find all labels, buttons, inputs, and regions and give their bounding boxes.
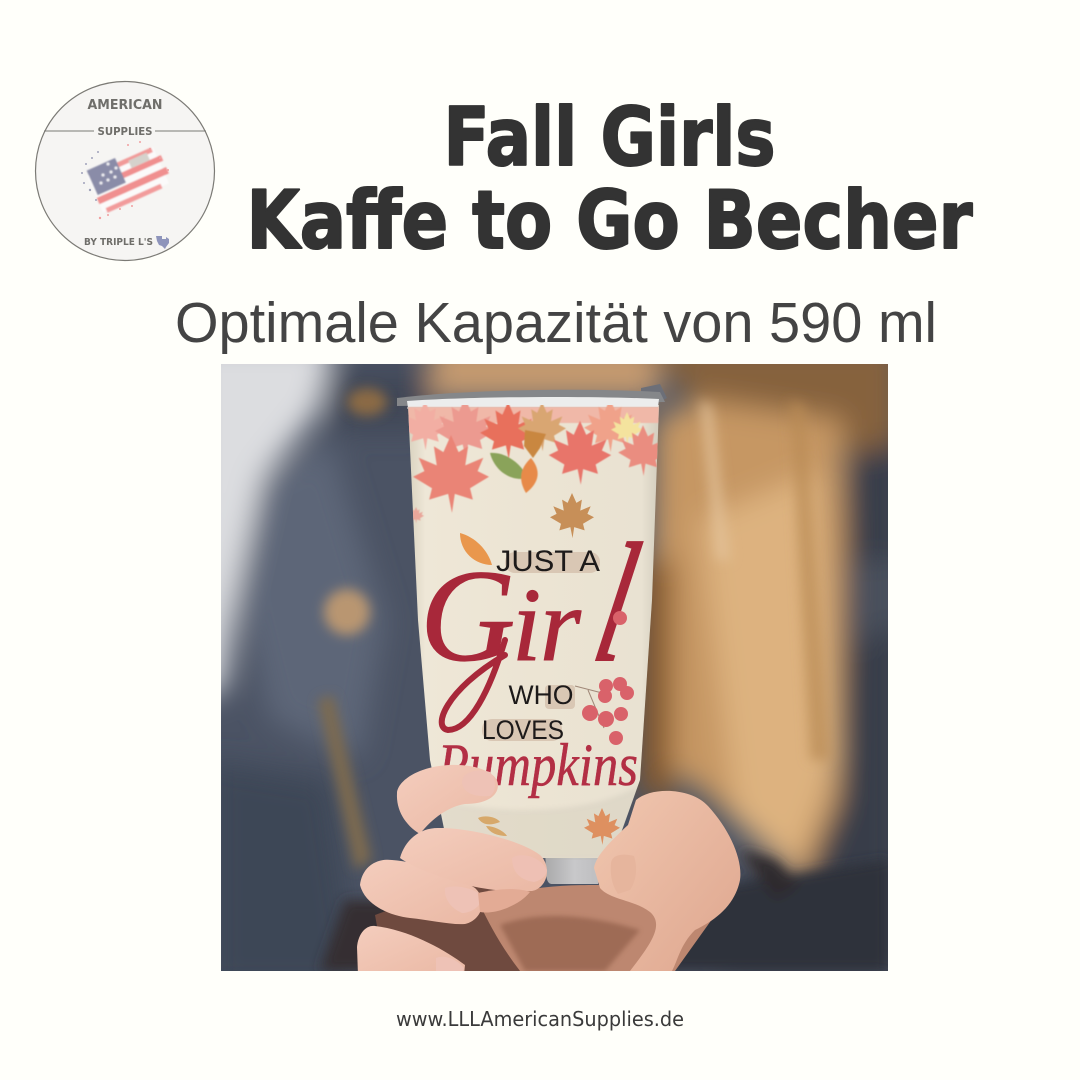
artwork word: Girl: i — [512, 566, 541, 683]
berries — [575, 611, 634, 745]
website url: www.LLLAmericanSupplies.de — [396, 1007, 684, 1031]
artwork text: Pumpkins: Pumpkins — [437, 732, 638, 798]
right thumb nail — [611, 855, 634, 882]
left index finger — [397, 765, 498, 834]
subtitle: Optimale Kapazität von 590 ml — [175, 291, 937, 355]
logo text: By Triple L's: BY TRIPLE L'S — [84, 237, 153, 248]
nail — [436, 957, 464, 971]
hands — [357, 765, 740, 975]
autumn leaves garland — [408, 405, 659, 522]
nail — [477, 771, 494, 796]
photo background: blurred jacket and hair — [221, 364, 888, 971]
tumbler bottom steel band — [545, 858, 598, 884]
artwork text: Who: WHO — [508, 680, 574, 710]
lower knuckle — [478, 889, 530, 913]
orange leaf — [460, 533, 492, 565]
tumbler lid — [397, 384, 667, 408]
tumbler artwork — [401, 398, 668, 860]
title — [246, 91, 973, 267]
logo icon: distressed American flag — [81, 140, 173, 219]
photo: woman holding tumbler — [221, 364, 888, 971]
logo divider lines and Supplies text: SUPPLIES — [98, 125, 153, 138]
logo icon: Texas mark — [156, 236, 169, 249]
artwork word: Girl — [426, 541, 644, 662]
left little finger — [357, 926, 465, 975]
shadow between fingers — [375, 886, 540, 971]
artwork word: Girl: r — [540, 566, 582, 683]
artwork text: Loves: LOVES — [482, 715, 564, 745]
label highlight swashes — [482, 552, 600, 741]
nail — [514, 858, 547, 882]
left ring finger — [360, 860, 482, 924]
logo: American Supplies badge — [36, 82, 214, 260]
falling maple leaf — [550, 493, 594, 538]
tumbler — [397, 384, 668, 884]
logo text: American: AMERICAN — [88, 97, 162, 113]
left middle finger — [400, 828, 547, 891]
title line 1: Fall Girls — [444, 91, 776, 184]
artwork word: Girl: G — [420, 542, 515, 689]
G descender swash — [442, 640, 505, 730]
artwork word: Girl: l — [582, 510, 652, 698]
artwork text: Just a: JUST A — [496, 545, 600, 578]
right hand thumb and back of hand — [594, 791, 740, 971]
tumbler shading — [440, 785, 640, 860]
title line 2: Kaffe to Go Becher — [246, 174, 973, 267]
bottom leaves — [584, 808, 620, 845]
nail — [446, 887, 479, 913]
palm — [484, 885, 711, 971]
tumbler body — [408, 405, 659, 858]
